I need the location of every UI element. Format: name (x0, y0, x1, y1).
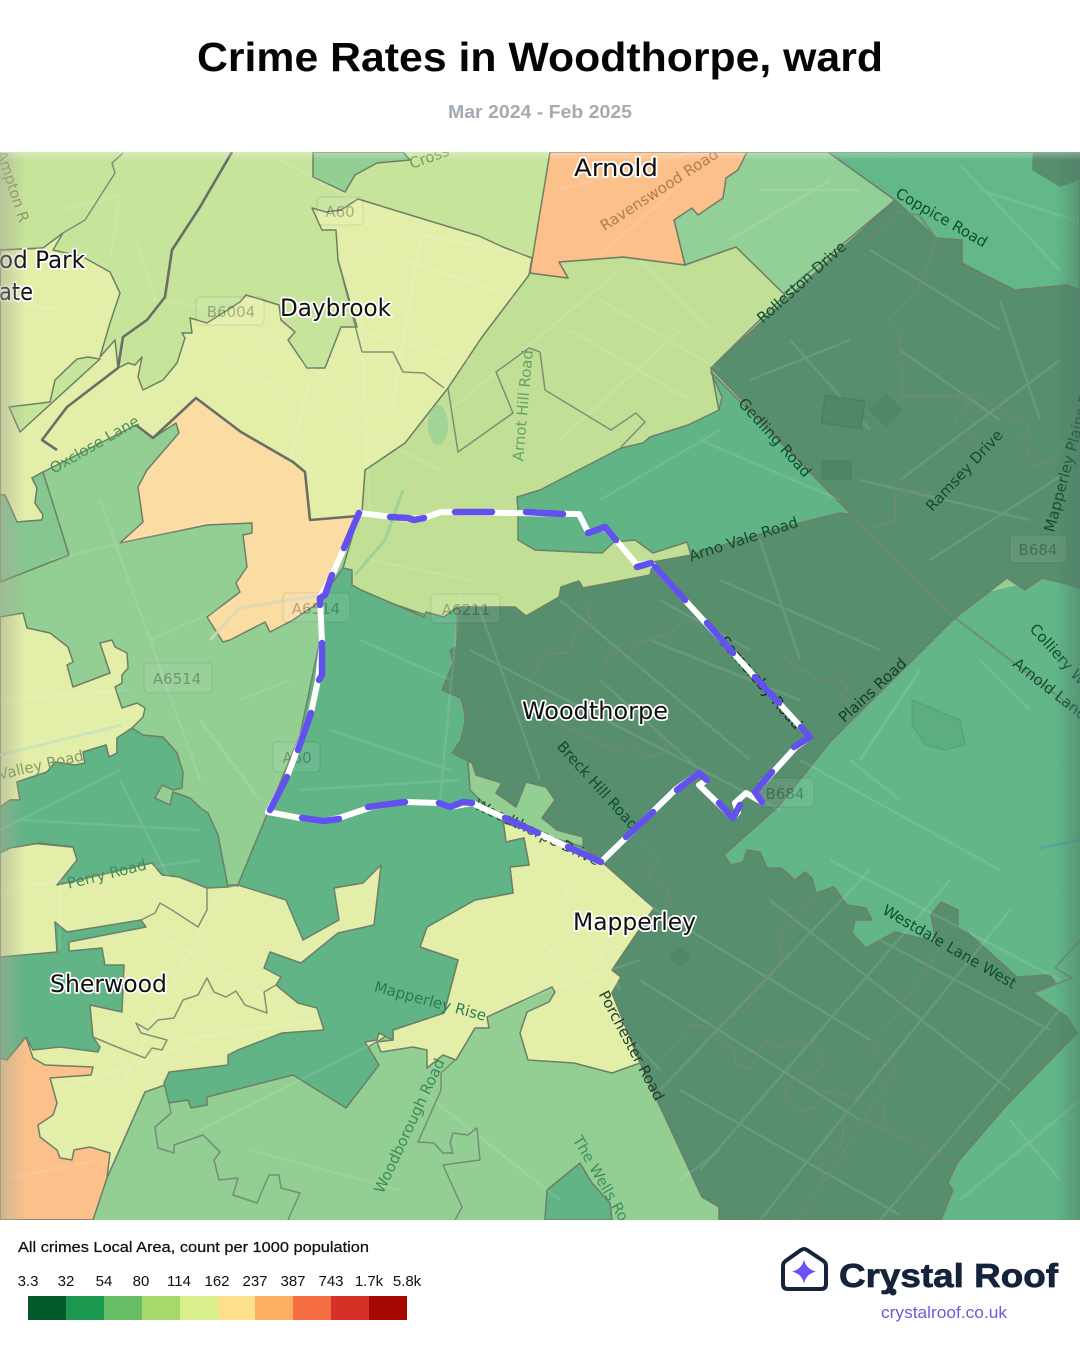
road labels: Mapperley Rise (372, 978, 488, 1025)
legend (18, 1239, 422, 1320)
road number badges: B684 (766, 785, 804, 803)
legend tick labels: 162 (204, 1273, 230, 1290)
region: Arnold orange (530, 152, 747, 278)
legend colour scale (28, 1296, 407, 1320)
road labels: Plains Road (835, 654, 910, 726)
road labels: The Wells Road (568, 1132, 642, 1241)
region: Sherwood green (0, 920, 146, 1060)
region: small light wedge (9, 357, 100, 432)
region: Sherwood pale yellow (0, 844, 386, 1178)
place labels: ate (0, 278, 33, 306)
road labels: Arnot Hill Road (509, 349, 537, 462)
region: east green (700, 570, 1080, 1220)
road network (0, 150, 1080, 1220)
road labels: Woodborough Road (370, 1056, 449, 1196)
park and water details (0, 393, 1080, 968)
road labels: Oxclose Lane (47, 412, 142, 477)
place labels: Daybrook (280, 294, 391, 322)
region: top right darker patch (1032, 152, 1080, 187)
place labels: Arnold (574, 154, 658, 182)
road labels: Somersby Road (715, 633, 806, 733)
road number badges: A6514 (292, 600, 340, 618)
legend tick labels: 743 (318, 1273, 344, 1290)
legend tick labels: 237 (242, 1273, 268, 1290)
region: south-west orange (0, 1037, 110, 1220)
road number badges: A6514 (153, 670, 201, 688)
wordmark: Crystal Roof (839, 1257, 1059, 1294)
region: The Wells green patch (545, 1163, 612, 1220)
road number badges: A60 (325, 203, 355, 221)
legend tick labels: 32 (58, 1273, 74, 1290)
area boundaries (0, 153, 1080, 1220)
icon: house with star (783, 1249, 826, 1289)
region: north-east green (828, 152, 1080, 290)
map edge fade (0, 152, 1080, 1220)
place labels: od Park (0, 246, 85, 274)
region: Arno Vale green (517, 372, 852, 555)
region: north-east medium green (674, 152, 895, 295)
road number badges: B684 (1019, 541, 1057, 559)
place labels: Mapperley (573, 908, 696, 936)
legend tick labels: 114 (167, 1273, 191, 1290)
legend tick labels: 54 (96, 1273, 112, 1290)
subtitle: date range: Mar 2024 - Feb 2025 (448, 102, 632, 122)
region: Mapperley pale yellow (377, 820, 654, 1073)
legend tick labels: 387 (280, 1273, 306, 1290)
road labels: Rolleston Drive (753, 238, 850, 327)
road labels: Coppice Road (893, 184, 990, 251)
region: Daybrook peach (120, 398, 358, 642)
region: Woodthorpe dark green (442, 200, 1080, 1220)
road number badges: A60 (282, 749, 312, 767)
region: south-centre green (164, 568, 602, 1108)
region: north-west light green (0, 152, 550, 389)
road labels: Ravenswood Road (597, 145, 722, 235)
legend tick labels: 80 (133, 1273, 149, 1290)
ward boundary: Woodthorpe (268, 512, 810, 862)
road labels: Cross (407, 142, 452, 173)
road labels: Arno Vale Road (687, 513, 800, 565)
legend tick labels (18, 1273, 422, 1290)
region: mid-left pale yellow (0, 613, 145, 807)
road labels: Porchester Road (595, 988, 668, 1104)
logo: Crystal Roof (783, 1249, 1059, 1322)
legend title: All crimes Local Area, count per 1000 population (18, 1239, 369, 1256)
region: west pocket green (0, 472, 69, 582)
region: centre light green (343, 247, 785, 640)
legend tick labels: 3.3 (18, 1273, 38, 1290)
title: Crime Rates in Woodthorpe, ward (197, 34, 883, 80)
place labels: Sherwood (50, 970, 167, 998)
thick boundary line (42, 152, 358, 520)
legend tick labels: 1.7k (355, 1273, 384, 1290)
legend tick labels: 5.8k (393, 1273, 422, 1290)
road number badges (144, 197, 1067, 807)
website link: crystalroof.co.uk (881, 1304, 1008, 1322)
road labels: Woodthorpe Drive (472, 796, 603, 869)
road number badges: A6211 (442, 601, 490, 619)
region: Daybrook pale yellow (0, 199, 532, 522)
road labels: Perry Road (65, 856, 148, 893)
region: north teal patch (313, 152, 410, 192)
road labels: Gedling Road (735, 394, 815, 481)
road labels: Westdale Lane West (879, 901, 1020, 992)
road labels: Ramsey Drive (922, 426, 1007, 515)
road number badges: B6004 (207, 303, 255, 321)
region: west green (0, 728, 228, 888)
place labels (0, 154, 696, 998)
place labels: Woodthorpe (522, 697, 668, 725)
road labels: Breck Hill Road (553, 738, 642, 834)
